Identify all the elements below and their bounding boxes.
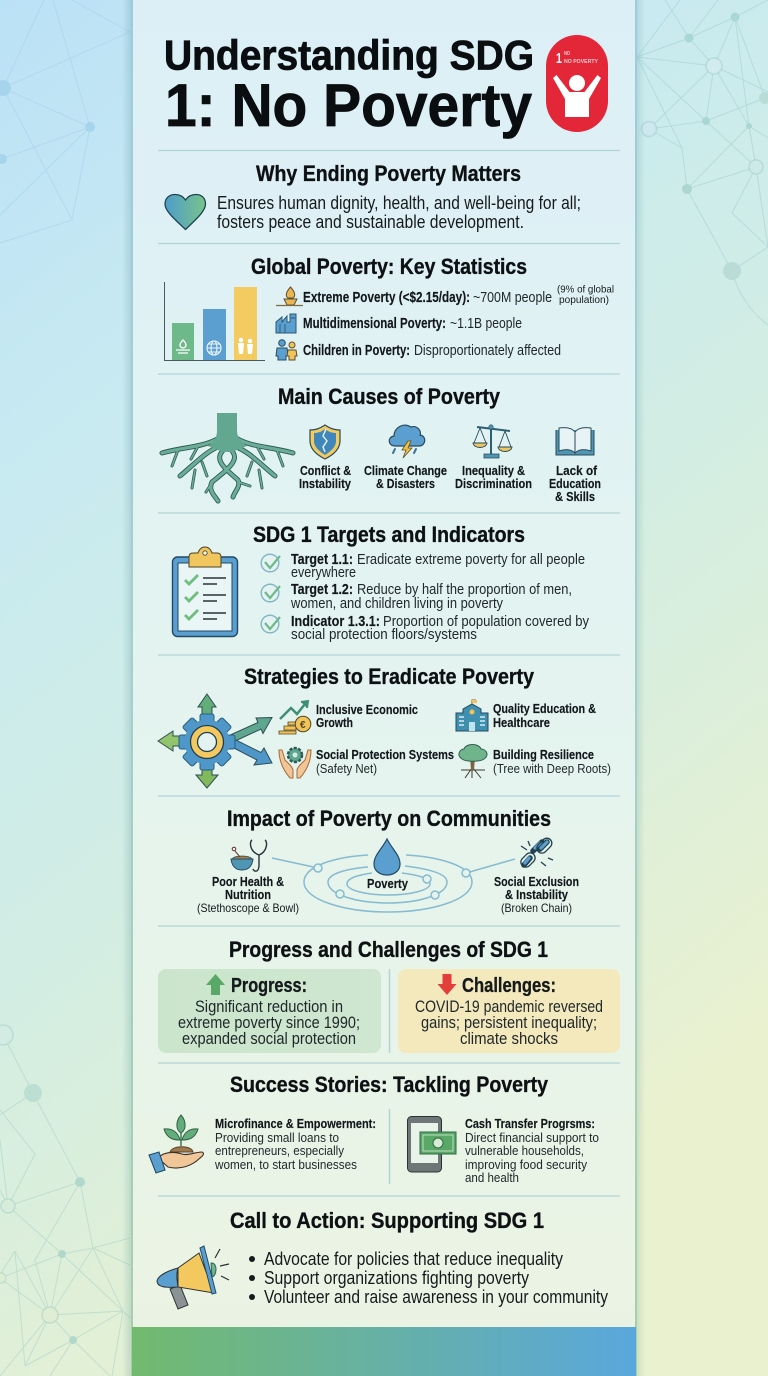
cause: conflict and instability — [299, 425, 352, 491]
story: microfinance: women, to start businesses — [214, 1157, 357, 1172]
panel: progress: Significant reduction in — [195, 997, 343, 1016]
cause: inequality and discrimination: Discrimination — [455, 476, 532, 491]
cause: lack of education and skills — [549, 428, 601, 504]
indicator 1.3.1: social protection floors/systems — [291, 626, 477, 643]
strategy: social protection systems — [279, 747, 454, 778]
description text: fosters peace and sustainable development. — [217, 212, 524, 232]
stat: extreme poverty: ~700M people — [473, 290, 552, 306]
impact: social exclusion and instability — [494, 836, 579, 915]
icon: SDG 1 badge — [546, 35, 608, 132]
impact: poor health and nutrition: Poor Health & — [212, 874, 284, 889]
cause: lack of education and skills: Education — [549, 476, 601, 491]
strategy: inclusive economic growth: Growth — [316, 715, 353, 730]
strategy: quality education and healthcare — [456, 700, 596, 731]
strategy: building resilience: (Tree with Deep Roots) — [493, 761, 611, 776]
stat: multidimensional poverty — [276, 314, 522, 333]
strategy: social protection systems: (Safety Net) — [316, 761, 377, 776]
description text — [217, 193, 581, 232]
heading: Impact of Poverty on Communities — [227, 806, 551, 831]
section: call to action — [157, 1208, 608, 1309]
impact: social exclusion and instability: Social Exclusion — [494, 874, 579, 889]
panel shadows — [122, 0, 645, 1376]
cause: climate change and disasters: & Disasters — [376, 476, 435, 491]
section dividers — [158, 150, 620, 1196]
strategy: building resilience — [459, 744, 611, 778]
icon: SDG 1 badge: NO POVERTY — [564, 59, 598, 65]
cause: conflict and instability: Instability — [299, 476, 352, 491]
title: Understanding SDG — [164, 32, 534, 78]
stat: extreme poverty: population) — [559, 294, 609, 306]
background network: top left — [0, 0, 130, 243]
indicator 1.3.1: Indicator 1.3.1: — [291, 613, 380, 630]
section: targets and indicators — [172, 522, 589, 643]
target 1.2: Target 1.2: — [291, 581, 353, 598]
stat: children in poverty: Children in Poverty: — [303, 343, 410, 359]
heading: Strategies to Eradicate Poverty — [244, 664, 534, 689]
footer colour band — [132, 1327, 636, 1376]
divider — [388, 969, 390, 1053]
panel: challenges: climate shocks — [460, 1029, 558, 1048]
cause: inequality and discrimination — [455, 425, 532, 491]
impact: social exclusion and instability: (Broken Chain) — [501, 901, 572, 915]
story: microfinance: Providing small loans to — [215, 1130, 339, 1145]
heading: Progress and Challenges of SDG 1 — [229, 937, 548, 962]
story: cash transfer programs: improving food security — [465, 1157, 587, 1172]
panel: progress: expanded social protection — [182, 1029, 356, 1048]
strategy: inclusive economic growth: Inclusive Economic — [316, 702, 418, 717]
stat: extreme poverty — [276, 284, 614, 306]
heading: Main Causes of Poverty — [278, 384, 500, 409]
story: microfinance — [214, 1116, 376, 1172]
heading: Global Poverty: Key Statistics — [251, 254, 527, 279]
target 1.2: women, and children living in poverty — [290, 595, 503, 612]
bullet list: Support organizations fighting poverty — [264, 1268, 529, 1288]
panel: progress — [158, 969, 381, 1053]
impact: social exclusion and instability: & Instability — [505, 887, 569, 902]
icon: gear with arrows — [158, 694, 272, 788]
strategy: quality education and healthcare: Quality Education & — [493, 701, 596, 716]
title: 1: No Poverty — [165, 72, 533, 139]
description text: Ensures human dignity, health, and well-being for all; — [217, 193, 581, 213]
stat: extreme poverty: (9% of global — [557, 284, 614, 296]
main panel — [131, 0, 637, 1376]
icon: heart — [165, 194, 206, 230]
target 1.2: Reduce by half the proportion of men, — [357, 581, 572, 598]
heading: SDG 1 Targets and Indicators — [253, 522, 525, 547]
icon: megaphone — [157, 1246, 229, 1309]
icon: SDG 1 badge: NO — [564, 51, 571, 57]
section: success stories — [149, 1072, 599, 1185]
ripple diagram — [272, 855, 515, 912]
icon: tree roots — [162, 413, 293, 501]
bullet list: Volunteer and raise awareness in your community — [264, 1287, 608, 1307]
target 1.1: Target 1.1: — [291, 551, 353, 568]
story: microfinance: entrepreneurs, especially — [215, 1143, 344, 1158]
story: cash transfer programs: Direct financial support to — [465, 1130, 599, 1145]
story: cash transfer programs: and health — [465, 1170, 519, 1185]
section: main causes — [162, 384, 601, 504]
background network: top right — [637, 0, 768, 325]
bullet list — [249, 1249, 608, 1307]
strategy: building resilience: Building Resilience — [493, 747, 594, 762]
target 1.1: everywhere — [291, 564, 356, 581]
label: poverty: Poverty — [367, 876, 409, 891]
story: cash transfer programs: Cash Transfer Progrsms: — [465, 1116, 595, 1131]
panel: progress: extreme poverty since 1990; — [178, 1013, 360, 1032]
story: cash transfer programs: vulnerable households, — [465, 1143, 584, 1158]
icon: SDG 1 badge: 1 — [556, 50, 562, 67]
heading: Call to Action: Supporting SDG 1 — [230, 1208, 544, 1233]
panel: challenges — [398, 969, 620, 1053]
section: progress and challenges — [158, 937, 620, 1053]
background network: bottom left — [0, 1025, 130, 1376]
impact: poor health and nutrition: Nutrition — [225, 887, 271, 902]
heading: Success Stories: Tackling Poverty — [230, 1072, 548, 1097]
divider — [388, 1109, 390, 1184]
strategy: inclusive economic growth: € — [300, 720, 306, 731]
icon: phone with cash — [408, 1116, 456, 1172]
stat: extreme poverty: Extreme Poverty (<$2.15/day): — [303, 290, 470, 306]
strategy: inclusive economic growth — [279, 701, 418, 734]
section: why ending poverty matters — [165, 161, 581, 232]
target 1.1: Eradicate extreme poverty for all people — [357, 551, 585, 568]
cause: climate change and disasters — [364, 425, 447, 491]
stat: children in poverty — [276, 340, 561, 360]
target 1.1 — [261, 551, 585, 581]
panel: challenges: COVID-19 pandemic reversed — [415, 997, 603, 1016]
section: strategies — [158, 664, 611, 788]
heading: Why Ending Poverty Matters — [256, 161, 521, 186]
stat: children in poverty: Disproportionately affected — [414, 343, 561, 359]
indicator 1.3.1: Proportion of population covered by — [383, 613, 589, 630]
cause: conflict and instability: Conflict & — [300, 463, 351, 478]
indicator 1.3.1 — [261, 613, 589, 643]
stat: multidimensional poverty: ~1.1B people — [450, 316, 522, 332]
bullet list: Advocate for policies that reduce inequality — [264, 1249, 563, 1269]
icon: hand with seedling — [149, 1115, 203, 1173]
target 1.2 — [261, 581, 572, 612]
strategy: quality education and healthcare: Healthcare — [493, 715, 550, 730]
cause: lack of education and skills: Lack of — [556, 463, 598, 478]
impact: poor health and nutrition: (Stethoscope & Bowl) — [197, 901, 299, 915]
icon: clipboard — [172, 547, 238, 636]
story: microfinance: Microfinance & Empowerment: — [215, 1116, 376, 1131]
strategy: social protection systems: Social Protection Systems — [316, 747, 454, 762]
stat: multidimensional poverty: Multidimensional Poverty: — [303, 316, 446, 332]
impact: poor health and nutrition — [197, 840, 299, 915]
panel: challenges: Challenges: — [462, 974, 556, 997]
title — [164, 32, 534, 139]
story: cash transfer programs — [465, 1116, 599, 1185]
panel: challenges: gains; persistent inequality; — [421, 1013, 597, 1032]
cause: lack of education and skills: & Skills — [555, 489, 595, 504]
cause: climate change and disasters: Climate Change — [364, 463, 447, 478]
cause: inequality and discrimination: Inequality & — [462, 463, 525, 478]
panel: progress: Progress: — [231, 974, 307, 997]
icon: water drop — [374, 839, 400, 875]
bar chart — [164, 282, 265, 360]
section: key statistics — [164, 254, 614, 360]
section: impact on communities — [197, 806, 579, 915]
